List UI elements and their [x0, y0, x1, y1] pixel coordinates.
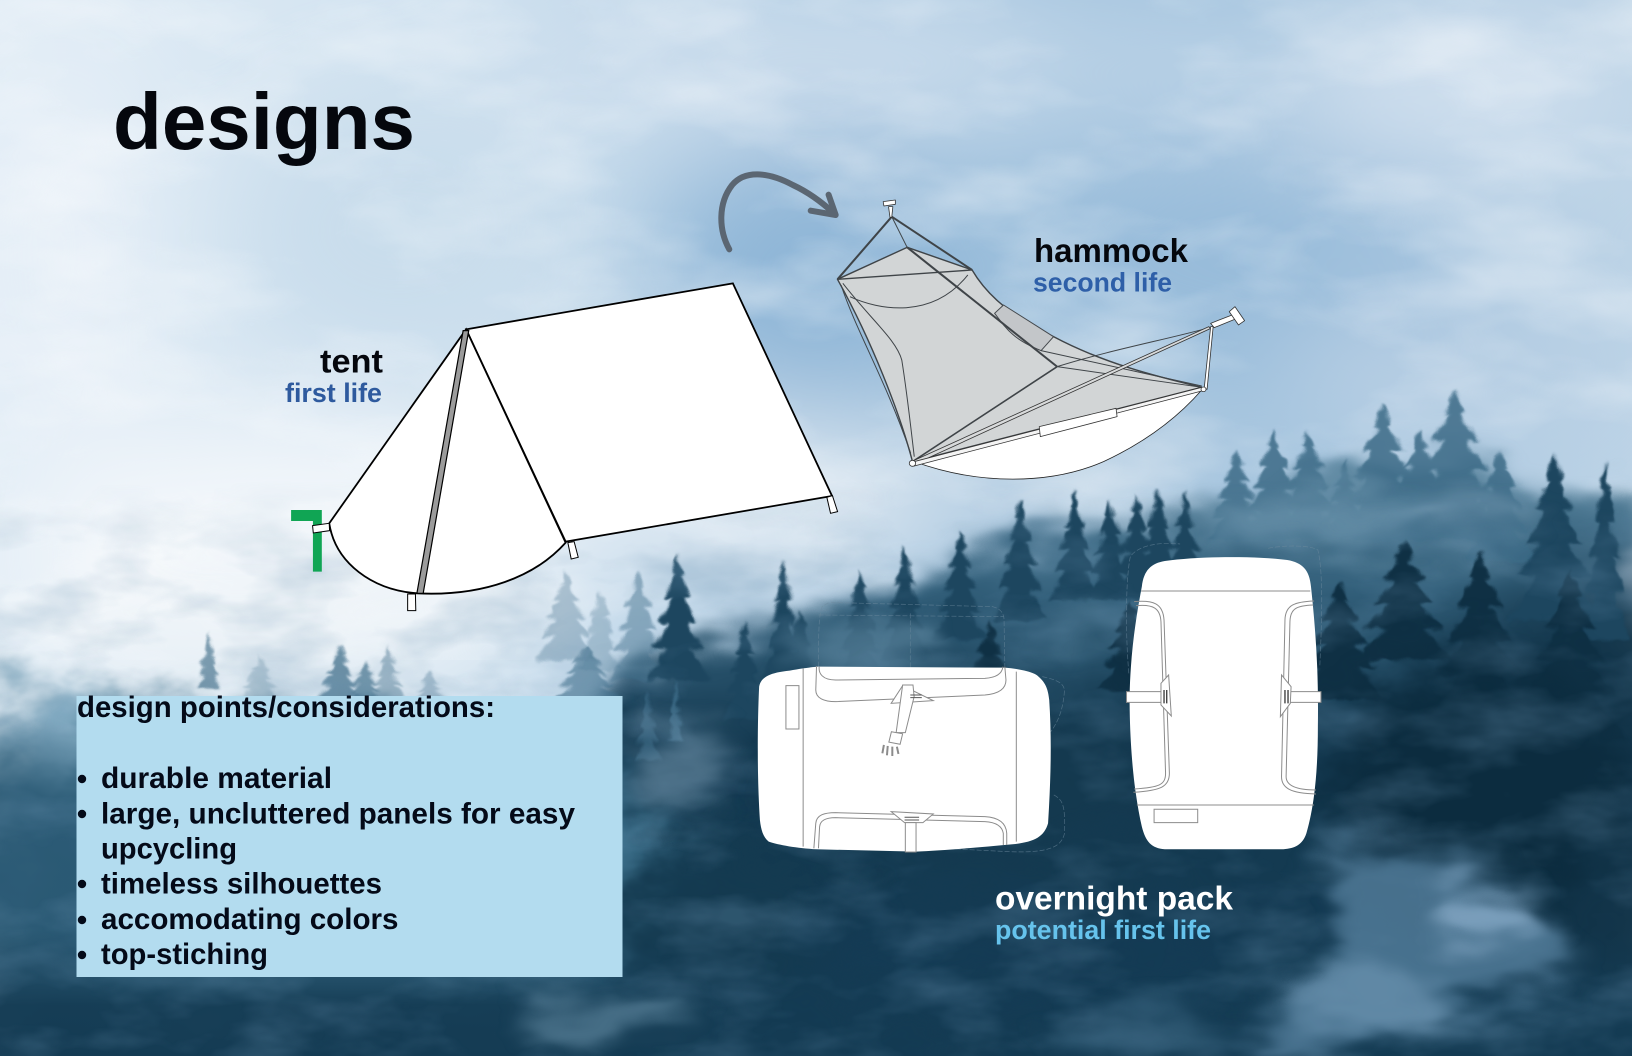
hammock label: hammock — [1034, 232, 1189, 269]
panel heading: design points/considerations: — [77, 691, 495, 724]
fog lower right — [510, 720, 1585, 1056]
hammock spreader bars — [883, 200, 1245, 466]
tent pole — [417, 331, 469, 593]
overnight pack label — [995, 880, 1234, 945]
panel: design points — [76, 691, 622, 977]
pack: folded view — [758, 666, 1051, 852]
tree lines — [196, 390, 1538, 760]
title: designs — [113, 77, 415, 166]
bullet list: top-stiching — [101, 938, 268, 971]
lower-left dark hillside — [0, 680, 840, 1056]
right edge underpaint — [1332, 520, 1632, 1056]
tent illustration — [291, 283, 838, 611]
green stake — [291, 510, 322, 572]
pack: upright view — [1127, 557, 1321, 849]
pack ghost outlines — [818, 543, 1322, 852]
dark core of forest — [790, 660, 1630, 1010]
bullet list: timeless silhouettes — [101, 868, 382, 900]
tent front panel — [329, 329, 566, 594]
hammock label — [1033, 232, 1189, 298]
tent roof panel — [466, 283, 832, 542]
bullet list: upcycling — [101, 832, 237, 866]
arrow: tent to hammock — [721, 174, 836, 249]
bullet list: durable material — [101, 762, 332, 795]
hammock lines — [837, 217, 1207, 462]
overnight pack label: potential first life — [995, 915, 1211, 945]
bottom dark band — [0, 930, 1632, 1056]
overnight pack label: overnight pack — [995, 880, 1234, 916]
tent pegs — [313, 496, 838, 611]
bullet list — [78, 762, 576, 971]
left edge underpaint — [0, 710, 170, 1056]
bullet list: large, uncluttered panels for easy — [101, 798, 576, 830]
hammock label: second life — [1033, 268, 1172, 298]
bullet list: accomodating colors — [101, 903, 398, 936]
hammock canopy — [837, 247, 1202, 462]
overnight pack illustration — [758, 543, 1322, 852]
tent label — [285, 342, 383, 408]
fog texture — [0, 480, 1632, 1056]
tent label: tent — [320, 342, 383, 380]
hammock belly — [914, 390, 1202, 479]
tent label: first life — [285, 378, 382, 408]
forest mass — [520, 450, 1632, 1056]
hammock illustration — [837, 200, 1245, 479]
